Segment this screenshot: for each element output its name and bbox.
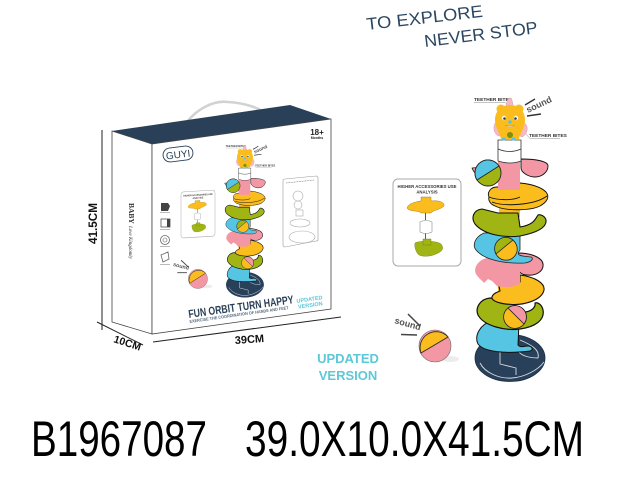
logo: GUYI: GUYI: [165, 149, 191, 162]
dimension: height 41.5CM: 41.5CM: [88, 203, 100, 244]
top yellow spiral: [488, 183, 548, 210]
label: sound with dashes: sound: [525, 94, 553, 115]
dimension: depth 10CM: 10CM: [112, 333, 143, 354]
dimension: width 39CM: [153, 317, 341, 347]
top green spiral: [473, 209, 546, 237]
lower green spiral: [477, 298, 543, 329]
bear teether topper: [494, 98, 527, 140]
updated version note: UPDATED: [317, 351, 379, 366]
ball shadow: [441, 356, 459, 362]
box parts outline panel: [283, 176, 318, 247]
ring band line: [498, 149, 521, 152]
logo: GUYI: [162, 145, 194, 163]
box accessory panel: parts analysis: [181, 190, 215, 238]
yellow column upper: [499, 205, 520, 217]
dimension: depth 10CM: [97, 322, 143, 354]
pink right bowl: [518, 253, 543, 275]
slogan: to explore never stop: [365, 2, 539, 51]
labels: teether bites: [474, 97, 568, 139]
box updated version note: [296, 295, 324, 311]
pink top bowl: [521, 159, 548, 177]
sound label: sound: [393, 315, 422, 332]
box front panel: [152, 119, 331, 334]
pink spiral column: [475, 255, 520, 287]
yellow column segment: [498, 280, 520, 305]
panel heading: [397, 184, 457, 194]
box updated version note: UPDATED: [296, 295, 323, 305]
lower blue spiral: [477, 321, 532, 352]
green accessory part: [415, 239, 443, 256]
panel: higher accessories use analysis: [393, 179, 461, 266]
labels: teether bites: TEETHER BITES: [474, 97, 513, 103]
main toy: ball spiral tower: [472, 94, 568, 382]
yellow accessory part: [407, 197, 444, 213]
ball: [419, 330, 451, 362]
lower yellow spiral: [492, 275, 544, 305]
box side panel: BABY: [127, 203, 136, 224]
age badge 18+: Months: [311, 136, 323, 140]
product box: [112, 102, 331, 334]
feature icons column: [160, 203, 170, 265]
box top lid: [112, 105, 331, 144]
box headline: [188, 294, 295, 324]
box handle: [182, 102, 268, 129]
age badge 18+: 18+: [310, 128, 324, 137]
red connector lines: [424, 213, 426, 240]
updated version note: [317, 351, 379, 383]
blue upper spiral: [474, 232, 532, 263]
box toy illustration: [225, 144, 276, 297]
box headline: EXERCISE THE COORDINATION OF HANDS AND FEET: [189, 305, 289, 324]
white ring cylinder: [498, 140, 521, 163]
box side panel: Love Kingdomly: [127, 225, 132, 260]
box side panel: [112, 131, 152, 334]
pink top column: [498, 160, 520, 190]
slogan: to explore never stop: TO EXPLORE: [365, 2, 484, 34]
item number: B1967087: [31, 411, 207, 467]
pink left bowl rim: [472, 166, 498, 182]
box headline: FUN ORBIT TURN HAPPY: [188, 294, 295, 321]
ball on lower track: [504, 306, 526, 328]
panel heading: HIGHER ACCESSORIES USE: [397, 184, 457, 189]
dimension: width 39CM: 39CM: [234, 333, 264, 347]
white ring part: [420, 220, 432, 234]
box ball with sound: [172, 259, 213, 289]
ball on upper track: [495, 237, 517, 260]
slogan: to explore never stop: NEVER STOP: [423, 18, 539, 51]
panel heading: ANALYSIS: [416, 190, 438, 194]
navy base with track: [475, 334, 545, 382]
labels: teether bites: TEETHER BITES: [529, 133, 568, 139]
updated version note: VERSION: [319, 368, 377, 383]
ball with sound marks: [393, 314, 459, 362]
box updated version note: VERSION: [298, 301, 323, 311]
top ball: [475, 160, 501, 186]
